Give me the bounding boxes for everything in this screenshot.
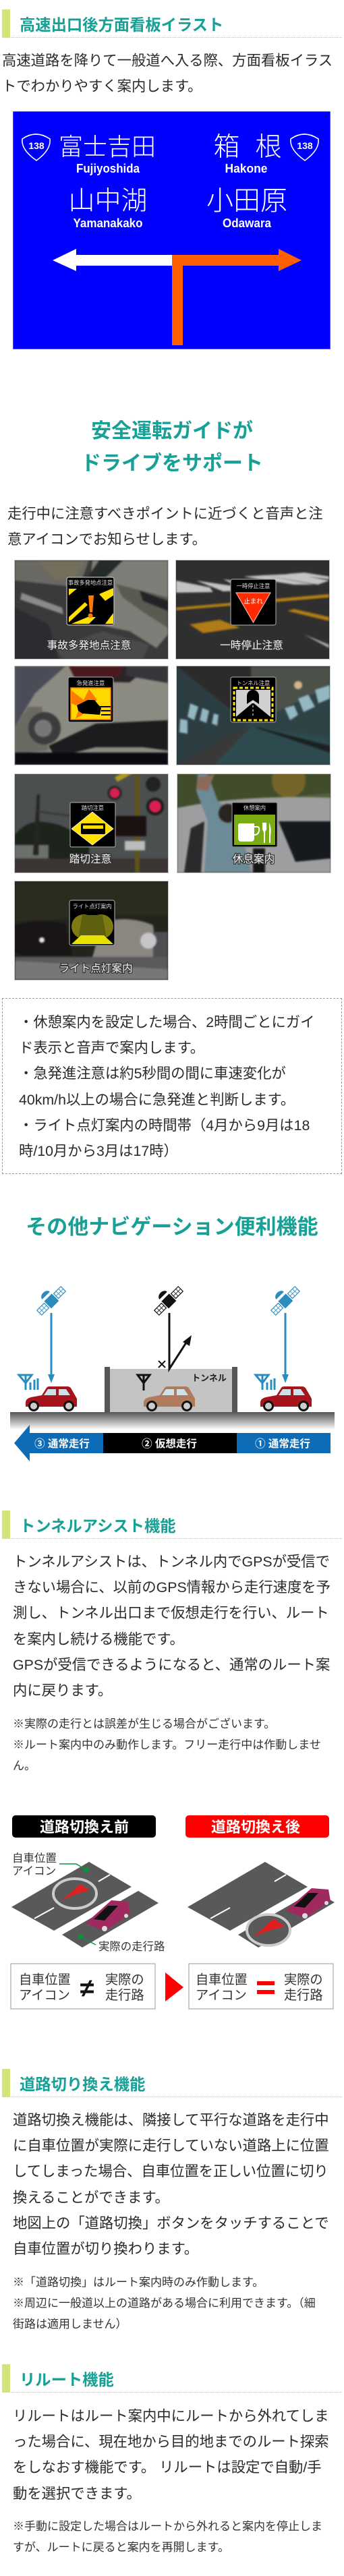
car before xyxy=(86,1900,130,1931)
notes: tunnel assist: ※ルート案内中のみ動作します。フリー走行中は作動しませ xyxy=(13,1738,321,1751)
place name: Hakone: Hakone xyxy=(225,162,267,175)
blue direction sign illustration xyxy=(13,111,331,349)
label: after xyxy=(185,1815,329,1838)
text: tunnel assist description: GPSが受信できるようになると、通常のルート案 xyxy=(13,1657,330,1673)
travel bar: ③ 通常走行 xyxy=(34,1438,90,1450)
tunnel assist diagram xyxy=(10,1286,335,1461)
icon: light-on guidance xyxy=(69,900,115,945)
icon: accident warning: 事故多発地点注意 xyxy=(68,579,113,586)
notes: reroute: すが、ルートに戻ると案内を再開します。 xyxy=(13,2541,229,2554)
antenna middle xyxy=(138,1375,150,1391)
car virtual xyxy=(144,1386,195,1411)
roads after xyxy=(188,1862,335,1948)
photo scene: tunnel xyxy=(177,666,330,765)
text: tunnel assist description: トンネルアシストは、トンネル内でGPSが受信で xyxy=(13,1554,330,1570)
place name: Fujiyoshida: Fujiyoshida xyxy=(76,162,140,175)
section title: 安全運転ガイドがドライブをサポート xyxy=(81,419,263,475)
icon: light-on guidance: ライト点灯案内 xyxy=(72,903,112,910)
icon: sudden start warning: 急発進注意 xyxy=(77,680,105,686)
icon: railroad crossing warning: 踏切注意 xyxy=(82,804,104,811)
notes: road switching: ※周辺に一般道以上の道路がある場合に利用できます。（細 xyxy=(13,2297,316,2310)
place name: Hakone: 箱 xyxy=(213,133,240,162)
text: sign illustration description xyxy=(2,53,333,94)
notes: road switching: 街路は適用しません） xyxy=(13,2318,127,2331)
note text: ド表示と音声で案内します。 xyxy=(19,1040,204,1056)
travel bar xyxy=(14,1425,331,1461)
icon: tunnel warning: トンネル注意 xyxy=(237,680,270,686)
photo scene: car rear xyxy=(15,666,168,765)
notes: tunnel assist: ※実際の走行とは誤差が生じる場合がございます。 xyxy=(13,1718,275,1730)
heading: 道路切り換え機能 xyxy=(2,2069,342,2097)
icon: sudden start warning xyxy=(68,677,113,722)
text: tunnel assist description: を案内し続ける機能です。 xyxy=(13,1631,184,1647)
text: safety guide description xyxy=(7,506,323,548)
text: road switching description: 地図上の「道路切換」ボタンをタッチすることで xyxy=(13,2215,329,2231)
place name: Yamanakako xyxy=(68,187,148,230)
notes: reroute: ※手動に設定した場合はルートから外れると案内を停止しま xyxy=(13,2520,322,2533)
arrow triangle xyxy=(165,1972,183,2001)
notes: tunnel assist: ん。 xyxy=(13,1759,36,1772)
caption: ライト点灯案内 xyxy=(59,962,133,974)
place name: Odawara xyxy=(206,186,287,230)
heading: トンネルアシスト機能: トンネルアシスト機能 xyxy=(20,1517,176,1535)
callout: 自車位置アイコン: アイコン xyxy=(12,1865,56,1877)
heading: 高速出口後方面看板イラスト: 高速出口後方面看板イラスト xyxy=(20,16,223,34)
callout: 実際の走行路 xyxy=(78,1934,165,1953)
heading: トンネルアシスト機能 xyxy=(2,1511,342,1539)
heading: 高速出口後方面看板イラスト xyxy=(2,9,342,38)
photo scene: crosswalk xyxy=(176,573,329,648)
photo scene: night road xyxy=(15,881,168,980)
photo: トンネル注意 xyxy=(176,666,331,765)
notes: road switching xyxy=(13,2276,316,2331)
travel bar: ② 仮想走行 xyxy=(142,1438,197,1450)
place name: Odawara: Odawara xyxy=(223,216,272,230)
icon: rest guidance: 休憩案内 xyxy=(243,804,266,811)
comparison box after xyxy=(189,1964,333,2009)
heading: リルート機能: リルート機能 xyxy=(20,2371,114,2389)
place name: Hakone xyxy=(213,133,282,175)
ground xyxy=(10,1412,335,1430)
place name: Fujiyoshida: 富士吉田 xyxy=(59,133,156,160)
text: reroute description: った場合に、現在地から目的地までのルート探索 xyxy=(13,2434,329,2450)
notes: reroute xyxy=(13,2520,322,2554)
icon: tunnel warning xyxy=(231,677,276,722)
label: before xyxy=(12,1815,156,1838)
text: reroute description xyxy=(13,2408,329,2502)
photo: 一時停止注意 xyxy=(175,560,330,660)
comparison box before: アイコン xyxy=(19,1989,70,2003)
text: sign illustration description: 高速道路を降りて一般道へ入る際、方面看板イラス xyxy=(2,53,333,69)
caption: 休息案内 xyxy=(233,853,275,865)
text: tunnel assist description: 測し、トンネル出口まで仮想走行を行い、ルート xyxy=(13,1605,329,1621)
position icon after xyxy=(247,1914,290,1945)
tunnel xyxy=(105,1367,237,1412)
comparison box before: ≠ xyxy=(80,1974,94,2003)
photo scene: accident xyxy=(15,560,168,659)
note text: ・急発進注意は約5秒間の間に車速変化が xyxy=(19,1065,286,1082)
photo scene: railroad crossing xyxy=(15,770,168,873)
note text: ・休憩案内を設定した場合、2時間ごとにガイ xyxy=(19,1014,314,1030)
comparison box after: アイコン xyxy=(196,1989,247,2003)
text: sign illustration description: トでわかりやすく案内します。 xyxy=(2,78,202,94)
text: road switching description: 自車位置が切り換わります。 xyxy=(13,2241,198,2257)
photo: 休息案内 xyxy=(177,773,331,873)
icon: stop sign: 一時停止注意 xyxy=(237,583,270,589)
text: tunnel assist description: きない場合に、以前のGPS情報から走行速度を予 xyxy=(13,1579,331,1596)
place name: Yamanakako: Yamanakako xyxy=(73,216,143,230)
photo: 踏切注意 xyxy=(14,773,169,873)
orange arrow right xyxy=(172,249,302,345)
text: road switching description: に自車位置が実際に走行していない道路上に位置 xyxy=(13,2138,329,2154)
roads before xyxy=(11,1862,159,1948)
route shield left 138 xyxy=(22,134,50,160)
heading: リルート機能 xyxy=(2,2364,342,2393)
caption: 踏切注意 xyxy=(69,853,111,865)
place name: Fujiyoshida xyxy=(59,133,156,175)
comparison box before: 自車位置 xyxy=(19,1972,71,1987)
car left xyxy=(26,1386,77,1411)
route shield right 138: 138 xyxy=(297,140,313,151)
photo scene: man stretching by car xyxy=(177,764,331,873)
place name: Odawara: 小田原 xyxy=(206,186,287,216)
caption: 事故多発地点注意 xyxy=(47,639,131,651)
text: road switching description: 換えることができます。 xyxy=(13,2190,169,2206)
position icon before xyxy=(53,1879,96,1908)
note text: 40km/h以上の場合に急発進と判断します。 xyxy=(19,1092,295,1108)
section title: 安全運転ガイドがドライブをサポート: 安全運転ガイドが xyxy=(91,420,253,442)
place name: Hakone: 根 xyxy=(255,133,282,162)
white arrow left xyxy=(53,249,172,271)
section title: その他ナビゲーション便利機能: その他ナビゲーション便利機能 xyxy=(26,1215,318,1239)
note text: 時/10月から3月は17時） xyxy=(19,1143,178,1159)
label: after: 道路切換え後 xyxy=(211,1819,300,1836)
section title: 安全運転ガイドがドライブをサポート: ドライブをサポート xyxy=(81,452,263,475)
comparison box before: 走行路 xyxy=(105,1988,144,2003)
callout: 自車位置アイコン xyxy=(12,1852,89,1877)
text: reroute description: をしなおす機能です。 リルートは設定で自動/手 xyxy=(13,2459,322,2476)
icon: stop sign xyxy=(231,579,276,625)
text: reroute description: リルートはルート案内中にルートから外れてしま xyxy=(13,2408,329,2424)
notes: tunnel assist xyxy=(13,1718,321,1772)
antenna left xyxy=(19,1375,38,1390)
text: road switching description: 道路切換え機能は、隣接して平行な道路を走行中 xyxy=(13,2112,329,2128)
travel bar: ① 通常走行 xyxy=(255,1438,310,1450)
icon: rest guidance xyxy=(232,802,277,847)
callout: 実際の走行路: 実際の走行路 xyxy=(98,1941,165,1953)
label: before: 道路切換え前 xyxy=(40,1819,129,1836)
comparison box before: 実際の xyxy=(105,1972,144,1987)
text: road switching description xyxy=(13,2112,329,2257)
text: road switching description: してしまった場合、自車位置を正しい位置に切り xyxy=(13,2163,328,2179)
photo: 急発進注意 xyxy=(14,666,169,765)
icon: accident warning xyxy=(67,577,114,625)
icon: stop sign: 止まれ xyxy=(243,597,263,606)
comparison box after: 走行路 xyxy=(284,1988,323,2003)
route shield left 138: 138 xyxy=(28,140,45,151)
text: safety guide description: 意アイコンでお知らせします。 xyxy=(7,531,206,548)
icon: railroad crossing warning xyxy=(70,802,115,847)
car right xyxy=(260,1386,312,1411)
heading: 道路切り換え機能: 道路切り換え機能 xyxy=(20,2076,145,2093)
comparison box before xyxy=(11,1964,155,2009)
satellite right with signal arrow xyxy=(265,1281,301,1383)
notes: road switching: ※「道路切換」はルート案内時のみ作動します。 xyxy=(13,2276,264,2289)
callout: 自車位置アイコン: 自車位置 xyxy=(12,1852,57,1865)
car after xyxy=(286,1888,331,1919)
route shield right 138 xyxy=(291,134,318,160)
text: safety guide description: 走行中に注意すべきポイントに近づくと音声と注 xyxy=(7,506,323,522)
text: reroute description: 動を選択できます。 xyxy=(13,2486,141,2502)
antenna right xyxy=(256,1375,275,1390)
text: tunnel assist description xyxy=(13,1554,331,1699)
comparison box after: 実際の xyxy=(284,1972,323,1987)
photo: ライト点灯案内 xyxy=(14,881,169,980)
text: tunnel assist description: 内に戻ります。 xyxy=(13,1682,112,1699)
caption: 一時停止注意 xyxy=(220,639,283,651)
satellite left with signal arrow xyxy=(31,1281,67,1383)
comparison box after: 自車位置 xyxy=(196,1972,248,1987)
photo: 事故多発地点注意 xyxy=(14,560,169,660)
road switching diagram xyxy=(11,1815,335,2010)
place name: Yamanakako: 山中湖 xyxy=(68,187,148,216)
note text: ・ライト点灯案内の時間帯（4月から9月は18 xyxy=(19,1117,310,1134)
satellite middle with blocked signal xyxy=(148,1281,192,1369)
note box: guidance notes xyxy=(2,998,342,1174)
tunnel: トンネル xyxy=(192,1373,227,1383)
note text xyxy=(19,1014,314,1159)
